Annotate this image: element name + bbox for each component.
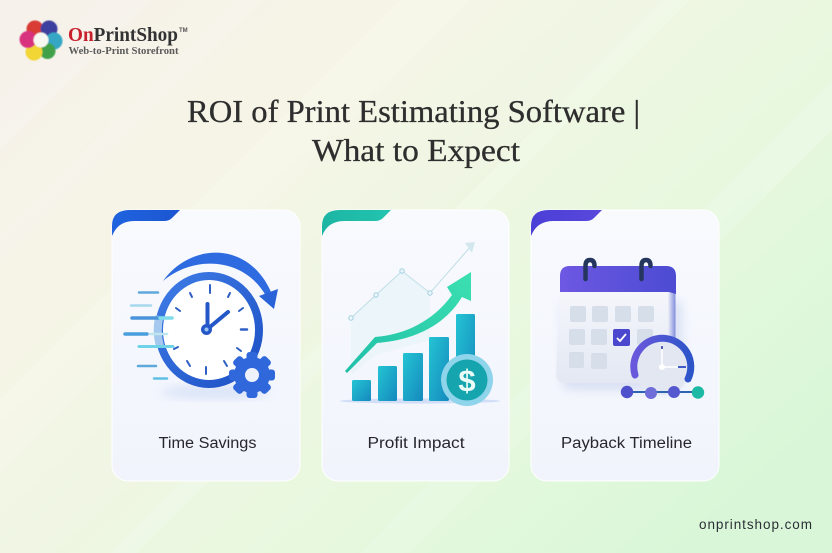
faded line chart [351,271,430,375]
icon: clock with arrow and gear [125,253,278,399]
title [187,93,640,168]
panel tab: teal [322,210,391,236]
logo icon: colour flower [20,20,62,60]
growth arrow [345,272,471,373]
calendar cells [569,306,654,369]
clock hands [208,304,228,329]
logo tagline: Web-to-Print Storefront [68,46,179,57]
dollar coin: $ [458,363,476,398]
title: ROI of Print Estimating Software | [187,93,640,129]
binder rings [586,260,650,279]
bars [352,314,475,401]
speed lines [125,292,173,378]
trademark: TM [179,28,188,34]
dollar coin [441,354,493,406]
panel: profit impact [322,210,509,481]
title: What to Expect [312,132,520,168]
panel tab: purple [531,210,602,236]
panel: time savings [112,210,300,481]
clock ticks [174,285,247,374]
checked cell [613,329,630,346]
curved arrow [163,253,271,296]
panel: payback timeline [531,210,719,481]
dial [634,338,691,395]
logo [20,20,188,60]
label: payback timeline: Payback Timeline [561,435,692,452]
logo wordmark: OnPrintShop [68,24,178,46]
gear [229,352,275,398]
icon: calendar with dial [556,260,704,399]
timeline [621,386,704,399]
label: profit impact: Profit Impact [368,435,465,452]
icon: growth chart with coin [340,242,500,406]
calendar body [556,292,675,383]
panel tab: blue [112,210,180,236]
label: time savings: Time Savings [158,435,257,452]
calendar header [560,266,676,294]
website url: onprintshop.com [699,517,812,532]
